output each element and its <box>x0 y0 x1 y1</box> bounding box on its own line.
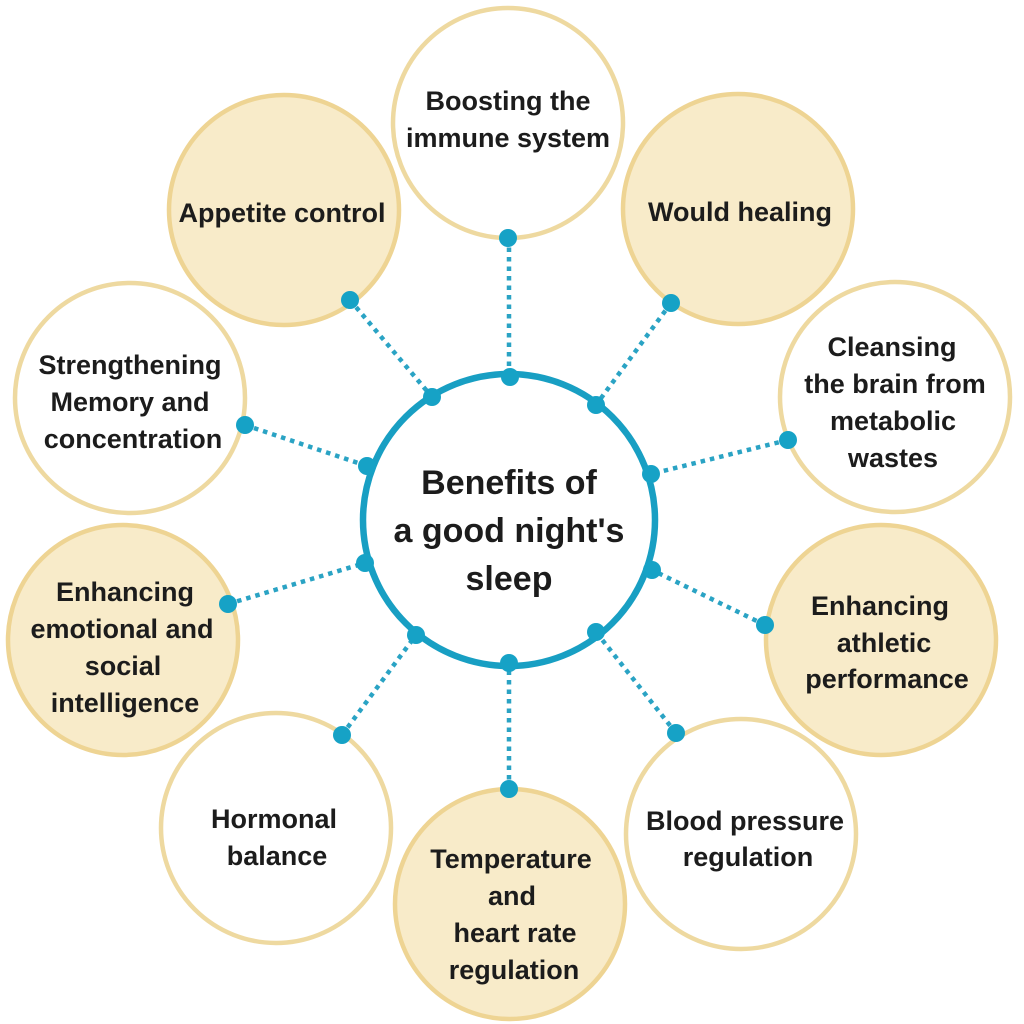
connector: temperature <box>500 663 518 798</box>
connector: blood pressure <box>596 632 685 742</box>
connector: wound healing <box>596 294 680 405</box>
panel: emotional and social intelligence <box>8 525 238 755</box>
panel: cleansing the brain <box>780 282 1010 512</box>
panel: boosting the immune system <box>393 8 623 238</box>
central circle: sleep <box>466 560 552 598</box>
panel: temperature and heart rate: regulation <box>449 955 579 985</box>
panel: emotional and social intelligence: intelligence <box>51 688 199 718</box>
panel: enhancing athletic performance: athletic <box>837 628 931 658</box>
panel: emotional and social intelligence: Enhancing <box>56 577 194 607</box>
panel: boosting the immune system: immune system <box>406 123 610 153</box>
panel: appetite control: Appetite control <box>178 198 386 228</box>
panel: hormonal balance: balance <box>227 841 327 871</box>
panel: emotional and social intelligence: emotional and <box>30 614 214 644</box>
panel: temperature and heart rate: heart rate <box>453 918 577 948</box>
connector: immune system <box>499 229 517 377</box>
connector: athletic performance <box>652 570 774 634</box>
panel: blood pressure regulation: regulation <box>683 842 813 872</box>
panel: boosting the immune system: Boosting the <box>426 86 590 116</box>
panel: temperature and heart rate <box>395 789 625 1019</box>
central circle: Benefits of <box>421 464 598 502</box>
connector: hormonal balance <box>333 635 416 744</box>
connector: emotional intelligence <box>219 563 365 613</box>
panel: enhancing athletic performance: performance <box>805 664 969 694</box>
panel: blood pressure regulation: Blood pressure <box>646 806 844 836</box>
panel: hormonal balance: Hormonal <box>211 804 337 834</box>
panel: strengthening memory <box>15 283 245 513</box>
panel: emotional and social intelligence: social <box>85 651 161 681</box>
panel: cleansing the brain: metabolic <box>830 406 956 436</box>
panel: would healing: Would healing <box>648 197 832 227</box>
panel: blood pressure regulation <box>626 719 856 949</box>
connector: cleansing the brain <box>651 431 797 474</box>
panel: strengthening memory: Strengthening <box>38 350 222 380</box>
panel: enhancing athletic performance <box>766 525 996 755</box>
central circle: a good night's <box>394 512 624 550</box>
panel: cleansing the brain: wastes <box>847 443 938 473</box>
panel: enhancing athletic performance: Enhancing <box>811 591 949 621</box>
connector: appetite <box>341 291 432 397</box>
panel: appetite control <box>169 95 399 325</box>
panel: strengthening memory: Memory and <box>50 387 210 417</box>
panel: cleansing the brain: Cleansing <box>827 332 957 362</box>
central circle <box>356 368 661 672</box>
panel: hormonal balance <box>161 713 391 943</box>
panel: temperature and heart rate: Temperature <box>430 844 592 874</box>
panel: temperature and heart rate: and <box>488 881 536 911</box>
panel: would healing <box>623 94 853 324</box>
panel: cleansing the brain: the brain from <box>804 369 986 399</box>
panel: strengthening memory: concentration <box>44 424 222 454</box>
connector: memory <box>236 416 367 466</box>
